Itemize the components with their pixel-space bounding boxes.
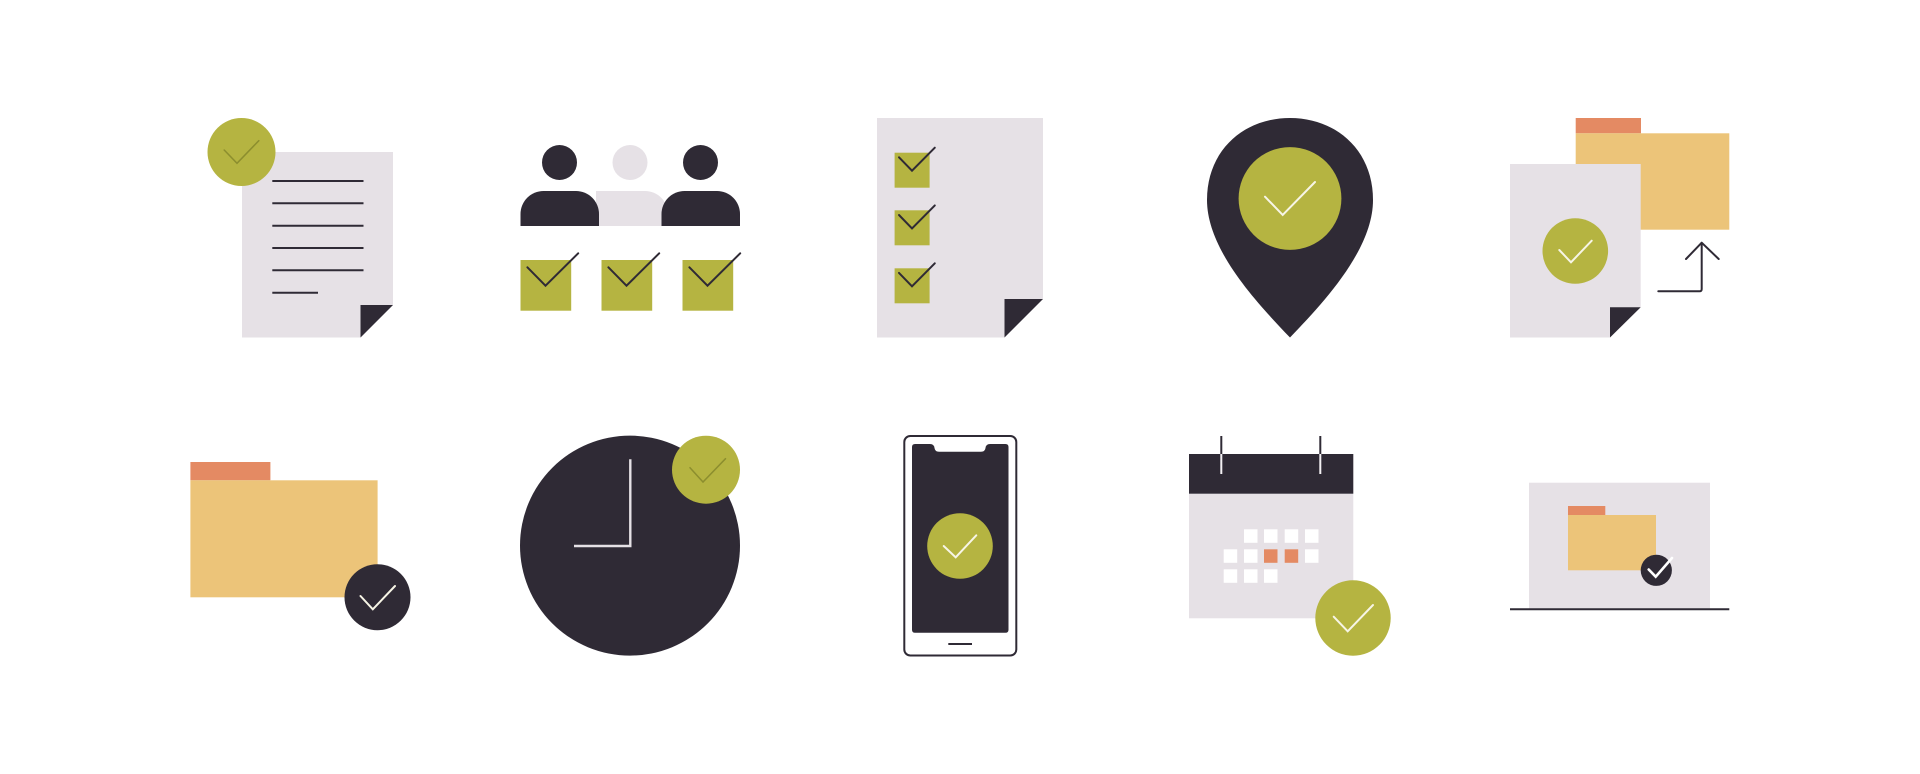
binder rings (1221, 436, 1320, 474)
icon: calendar with check badge (1189, 436, 1391, 656)
check mark (690, 459, 726, 482)
folder tab (1576, 118, 1641, 133)
check badge (1315, 580, 1391, 656)
clock face (520, 436, 740, 656)
clock hands (574, 459, 630, 546)
icon: clock with check badge (520, 436, 740, 656)
check mark (944, 535, 976, 557)
document page (242, 152, 393, 338)
icon: document with text lines and check badge (208, 118, 393, 338)
check badge (927, 513, 993, 579)
check badge (672, 436, 740, 504)
page corner fold (1610, 307, 1641, 338)
document (1510, 164, 1641, 338)
check badge (344, 564, 410, 630)
calendar header (1189, 454, 1353, 494)
folder tab (1568, 506, 1605, 515)
calendar sheet (1189, 494, 1353, 618)
right person (662, 145, 740, 226)
folder (190, 480, 378, 597)
middle person (596, 145, 668, 226)
check badge (1239, 147, 1341, 250)
page corner fold (360, 305, 393, 338)
laptop screen (1529, 483, 1710, 609)
page (877, 118, 1043, 338)
check mark (1265, 182, 1315, 215)
arrow (1658, 243, 1719, 291)
check badge (1542, 218, 1608, 284)
icon: checklist page (877, 118, 1043, 338)
folder (1568, 515, 1656, 570)
icon: folder with check badge (190, 462, 410, 630)
check badge (208, 118, 276, 186)
home bar (948, 643, 972, 645)
icon: location pin with check (1207, 118, 1373, 338)
icon: document moving to folder (1510, 118, 1729, 338)
text lines (272, 181, 364, 293)
icon: laptop with folder (1510, 483, 1729, 609)
pin (1207, 118, 1373, 338)
phone outline (904, 436, 1016, 656)
icon: three people with check boxes (520, 145, 740, 311)
phone screen (912, 444, 1008, 633)
folder tab (190, 462, 270, 480)
check mark (1559, 241, 1592, 262)
check badge (1641, 555, 1672, 586)
check mark (360, 586, 395, 609)
check boxes (520, 253, 740, 311)
page corner fold (1004, 299, 1043, 338)
check mark (1334, 605, 1373, 631)
left person (520, 145, 599, 226)
check mark (1649, 558, 1672, 577)
date cells (1224, 529, 1318, 583)
laptop base (1510, 608, 1729, 610)
checklist items (895, 148, 935, 303)
icon: smartphone with check (904, 436, 1016, 656)
folder (1576, 133, 1729, 230)
